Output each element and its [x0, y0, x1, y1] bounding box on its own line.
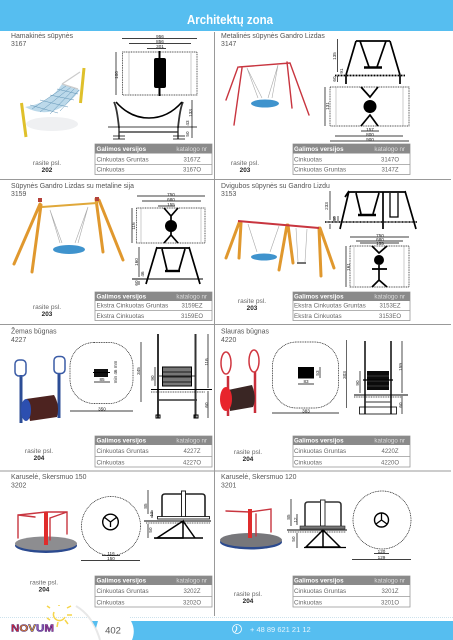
catalogue table: Cinkuotas Gruntas: [96, 156, 149, 164]
technical drawing: 956: [156, 34, 164, 39]
footer curve: [76, 606, 100, 640]
technical drawing: [325, 39, 409, 142]
technical drawing: 160: [134, 258, 139, 266]
page reference: rasite psl.: [234, 591, 262, 598]
catalogue table: katalogo nr: [176, 294, 207, 300]
page reference: 203: [42, 311, 53, 318]
technical drawing: plan: [352, 491, 411, 560]
heading: 3202: [11, 482, 26, 490]
technical drawing: plan: min 46 mm: [113, 360, 118, 383]
heading: 3147: [221, 41, 236, 48]
catalogue table: [95, 144, 212, 174]
heading: Hamakinės sūpynės: [11, 33, 73, 40]
technical drawing: 116: [131, 222, 136, 230]
catalogue table: Galimos versijos: [96, 578, 147, 584]
technical drawing: side: 85: [143, 503, 148, 509]
catalogue table: 4220O: [381, 460, 399, 466]
technical drawing: 680: [376, 237, 384, 242]
technical drawing: side: 12: [293, 517, 298, 523]
catalogue table: Cinkuotas Gruntas: [294, 588, 346, 595]
technical drawing: plan: 116: [107, 551, 115, 556]
catalogue table: 4227Z: [183, 449, 201, 455]
heading: Sūpynės Gandro Lizdas su metaline sija: [11, 183, 134, 190]
technical drawing: 46: [332, 216, 337, 222]
technical drawing: [324, 191, 417, 287]
technical drawing: 131: [325, 102, 330, 110]
page reference: 204: [34, 455, 45, 462]
catalogue table: Cinkuotas: [294, 460, 322, 466]
technical drawing: 60: [332, 76, 337, 82]
catalogue table: Cinkuotas: [294, 156, 322, 164]
catalogue table: Galimos versijos: [96, 438, 147, 444]
technical drawing: 680: [167, 197, 175, 202]
technical drawing: plan: [81, 496, 140, 561]
technical drawing: side: 90: [150, 375, 155, 381]
phone number: + 48 89 621 21 12: [250, 625, 311, 634]
catalogue table: [95, 292, 212, 320]
catalogue table: [293, 292, 410, 320]
technical drawing: side: 12: [149, 511, 154, 517]
catalogue table: Cinkuotas: [294, 600, 322, 606]
panel: karuselė 3201: [220, 474, 411, 607]
technical drawing: 50: [185, 131, 190, 137]
technical drawing: side: [150, 334, 212, 418]
title: Architektų zona: [187, 12, 274, 27]
catalogue table: 3167Z: [183, 158, 201, 164]
catalogue table: [293, 436, 410, 467]
technical drawing: side: 159: [398, 363, 403, 371]
panel: hamakinės sūpynės 3167: [11, 33, 212, 174]
header band: [0, 0, 453, 31]
catalogue table: katalogo nr: [176, 578, 207, 584]
heading: Metalinės sūpynės Gandro Lizdas: [221, 33, 325, 40]
catalogue table: Cinkuotas Gruntas: [294, 166, 346, 174]
technical drawing: plan: 129: [378, 555, 386, 560]
technical drawing: side: [143, 490, 211, 538]
heading: 3159: [11, 191, 26, 198]
catalogue table: 3201Z: [381, 589, 399, 595]
technical drawing: side: [286, 499, 347, 548]
technical drawing: 133: [188, 109, 193, 117]
catalogue table: 3159EZ: [181, 304, 203, 310]
technical drawing: plan: [70, 342, 141, 412]
technical drawing: side: 60: [398, 402, 403, 408]
technical drawing: plan: 53: [315, 370, 320, 376]
catalogue table: Galimos versijos: [96, 294, 147, 300]
heading: 3201: [221, 482, 236, 490]
heading: Dvigubos sūpynės su Gandro Lizdu: [221, 183, 330, 190]
technical drawing: 100: [114, 71, 119, 79]
page reference: rasite psl.: [238, 298, 266, 305]
page reference: 204: [39, 586, 50, 594]
catalogue table: Ekstra Cinkuotas Gruntas: [96, 302, 168, 310]
page number: 402: [105, 626, 121, 636]
catalogue table: [95, 576, 212, 607]
technical drawing: plan: 150: [107, 556, 115, 561]
technical drawing: [131, 192, 205, 286]
technical drawing: [108, 34, 197, 139]
catalogue table: 3167O: [183, 168, 201, 174]
panel: dvigubos sūpynės 3153: [221, 183, 417, 320]
technical drawing: 157: [366, 127, 374, 132]
technical drawing: 135: [332, 52, 337, 60]
catalogue table: katalogo nr: [176, 146, 207, 153]
catalogue table: Galimos versijos: [96, 146, 147, 153]
catalogue table: 3202Z: [183, 589, 201, 595]
catalogue table: Cinkuotas Gruntas: [96, 448, 149, 455]
catalogue table: 4220Z: [381, 449, 399, 455]
technical drawing: 161: [346, 263, 351, 271]
heading: 4220: [221, 337, 236, 344]
logo: NOVUM: [11, 624, 54, 634]
technical drawing: plan: 383: [302, 408, 310, 414]
photo: blue drum: [15, 356, 65, 423]
catalogue table: [95, 436, 212, 467]
footer: [0, 605, 453, 640]
technical drawing: 856: [156, 39, 164, 44]
catalogue table: Cinkuotas Gruntas: [294, 448, 346, 455]
technical drawing: 900: [366, 137, 374, 142]
photo: carousel: [220, 509, 282, 550]
technical drawing: side: 116: [204, 358, 209, 366]
photo: hammock: [22, 68, 84, 137]
photo: red drum: [220, 350, 259, 416]
catalogue table: 3159EO: [181, 314, 203, 320]
catalogue table: Cinkuotas: [96, 600, 125, 606]
technical drawing: plan: [272, 340, 347, 414]
heading: Žemas būgnas: [11, 328, 57, 336]
technical drawing: plan: 345: [136, 367, 141, 375]
heading: Slauras būgnas: [221, 328, 269, 336]
page reference: rasite psl.: [25, 448, 53, 455]
heading: Karuselė, Skersmuo 120: [221, 474, 296, 481]
technical drawing: 301: [156, 44, 164, 49]
photo: carousel: [15, 512, 77, 553]
technical drawing: 233: [324, 202, 329, 210]
technical drawing: 60: [134, 280, 139, 286]
technical drawing: plan: 350: [98, 406, 106, 412]
technical drawing: side: 60: [204, 402, 209, 408]
catalogue table: katalogo nr: [374, 438, 405, 444]
catalogue table: 4227O: [183, 460, 201, 466]
panel: sūpynės 3159: [11, 183, 212, 320]
page reference: rasite psl.: [234, 449, 262, 456]
technical drawing: plan: 83: [303, 379, 309, 384]
catalogue table: Ekstra Cinkuotas Gruntas: [294, 302, 366, 310]
heading: Karuselė, Skersmuo 150: [11, 474, 86, 481]
page reference: 204: [243, 598, 254, 605]
catalogue table: 3147Z: [381, 168, 399, 174]
technical drawing: side: 85: [286, 514, 291, 520]
page reference: rasite psl.: [231, 160, 259, 167]
catalogue table: Ekstra Cinkuotas: [96, 313, 144, 320]
page reference: 202: [42, 167, 53, 174]
catalogue table: Cinkuotas: [96, 166, 125, 174]
catalogue table: katalogo nr: [374, 578, 405, 584]
heading: 4227: [11, 337, 26, 344]
page reference: rasite psl.: [30, 580, 58, 586]
panel: slauras būgnas 4220: [220, 328, 410, 467]
catalogue table: [293, 576, 410, 607]
catalogue table: Ekstra Cinkuotas: [294, 313, 342, 320]
technical drawing: side: 50: [148, 527, 153, 533]
catalogue table: Cinkuotas: [96, 460, 125, 466]
photo: red metal swing: [226, 62, 309, 125]
icon: phone: [232, 624, 242, 634]
footer blue bar: [131, 621, 453, 640]
technical drawing: 155: [167, 202, 175, 207]
panel: metalinės sūpynės 3147: [221, 33, 410, 174]
technical drawing: 750: [376, 233, 384, 238]
photo: double swing: [226, 221, 334, 276]
panel: karuselė 3202: [11, 474, 212, 607]
technical drawing: plan: 303: [342, 371, 347, 379]
catalogue table: Galimos versijos: [294, 146, 344, 153]
catalogue table: 3202O: [183, 600, 201, 606]
technical drawing: side: 90: [355, 380, 360, 386]
catalogue table: katalogo nr: [176, 438, 207, 444]
catalogue table: Cinkuotas Gruntas: [96, 588, 149, 595]
technical drawing: 43: [185, 120, 190, 126]
catalogue table: 3153EZ: [379, 304, 401, 310]
page reference: rasite psl.: [33, 304, 61, 311]
catalogue table: Galimos versijos: [294, 578, 344, 584]
catalogue table: 3201O: [381, 600, 399, 606]
technical drawing: 155: [376, 241, 384, 246]
catalogue table: 3153EO: [379, 314, 401, 320]
catalogue table: 3147O: [381, 158, 399, 164]
catalogue table: Galimos versijos: [294, 294, 344, 300]
technical drawing: 91: [339, 68, 344, 74]
catalogue table: [293, 144, 410, 174]
technical drawing: side: 50: [291, 536, 296, 542]
technical drawing: plan: 120: [378, 549, 386, 554]
page reference: 203: [247, 305, 258, 312]
catalogue table: Galimos versijos: [294, 438, 344, 444]
page reference: 203: [240, 167, 251, 174]
technical drawing: side: [354, 341, 408, 414]
heading: 3167: [11, 41, 26, 48]
catalogue table: katalogo nr: [374, 294, 405, 300]
icon: sun: [47, 605, 72, 627]
heading: 3153: [221, 191, 236, 198]
technical drawing: plan: 85: [99, 377, 105, 382]
page reference: rasite psl.: [33, 160, 61, 167]
page reference: 204: [243, 456, 254, 463]
technical drawing: 750: [167, 192, 175, 197]
technical drawing: 46: [140, 271, 145, 277]
catalogue table: katalogo nr: [374, 146, 405, 153]
panel: žemas būgnas 4227: [11, 326, 212, 467]
photo: wooden swing: [14, 197, 123, 272]
footer corner mark: [92, 621, 98, 628]
technical drawing: 800: [366, 132, 374, 137]
